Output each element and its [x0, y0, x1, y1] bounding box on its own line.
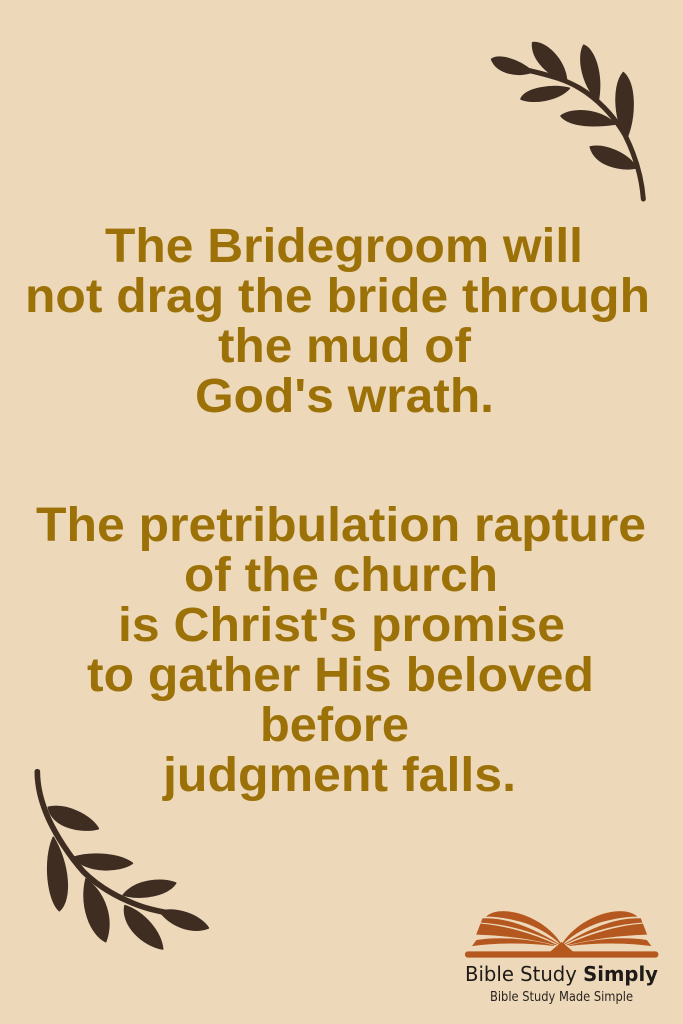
icon: bottom left olive branch — [37, 772, 208, 949]
text block: pretribulation rapture promise: judgment falls. — [162, 749, 516, 802]
heading: bridegroom statement — [25, 220, 650, 423]
heading: bridegroom statement: not drag the bride through — [25, 270, 650, 323]
text block: pretribulation rapture promise: of the church — [184, 549, 498, 602]
icon: open book — [465, 912, 658, 957]
text block: pretribulation rapture promise — [36, 499, 646, 802]
heading: bridegroom statement: The Bridegroom will — [105, 220, 583, 273]
logo name: Bible Study Simply — [465, 962, 658, 986]
text block: pretribulation rapture promise: The pretribulation rapture — [36, 499, 646, 552]
heading: bridegroom statement: the mud of — [218, 320, 472, 373]
text block: pretribulation rapture promise: to gather His beloved — [87, 649, 594, 702]
text block: pretribulation rapture promise: before — [260, 699, 409, 752]
text block: pretribulation rapture promise: is Christ's promise — [118, 599, 565, 652]
logo tagline: Bible Study Made Simple — [490, 989, 633, 1005]
logo: Bible Study Simply — [465, 912, 658, 1005]
icon: top right olive branch — [492, 43, 643, 199]
heading: bridegroom statement: God's wrath. — [195, 370, 494, 423]
